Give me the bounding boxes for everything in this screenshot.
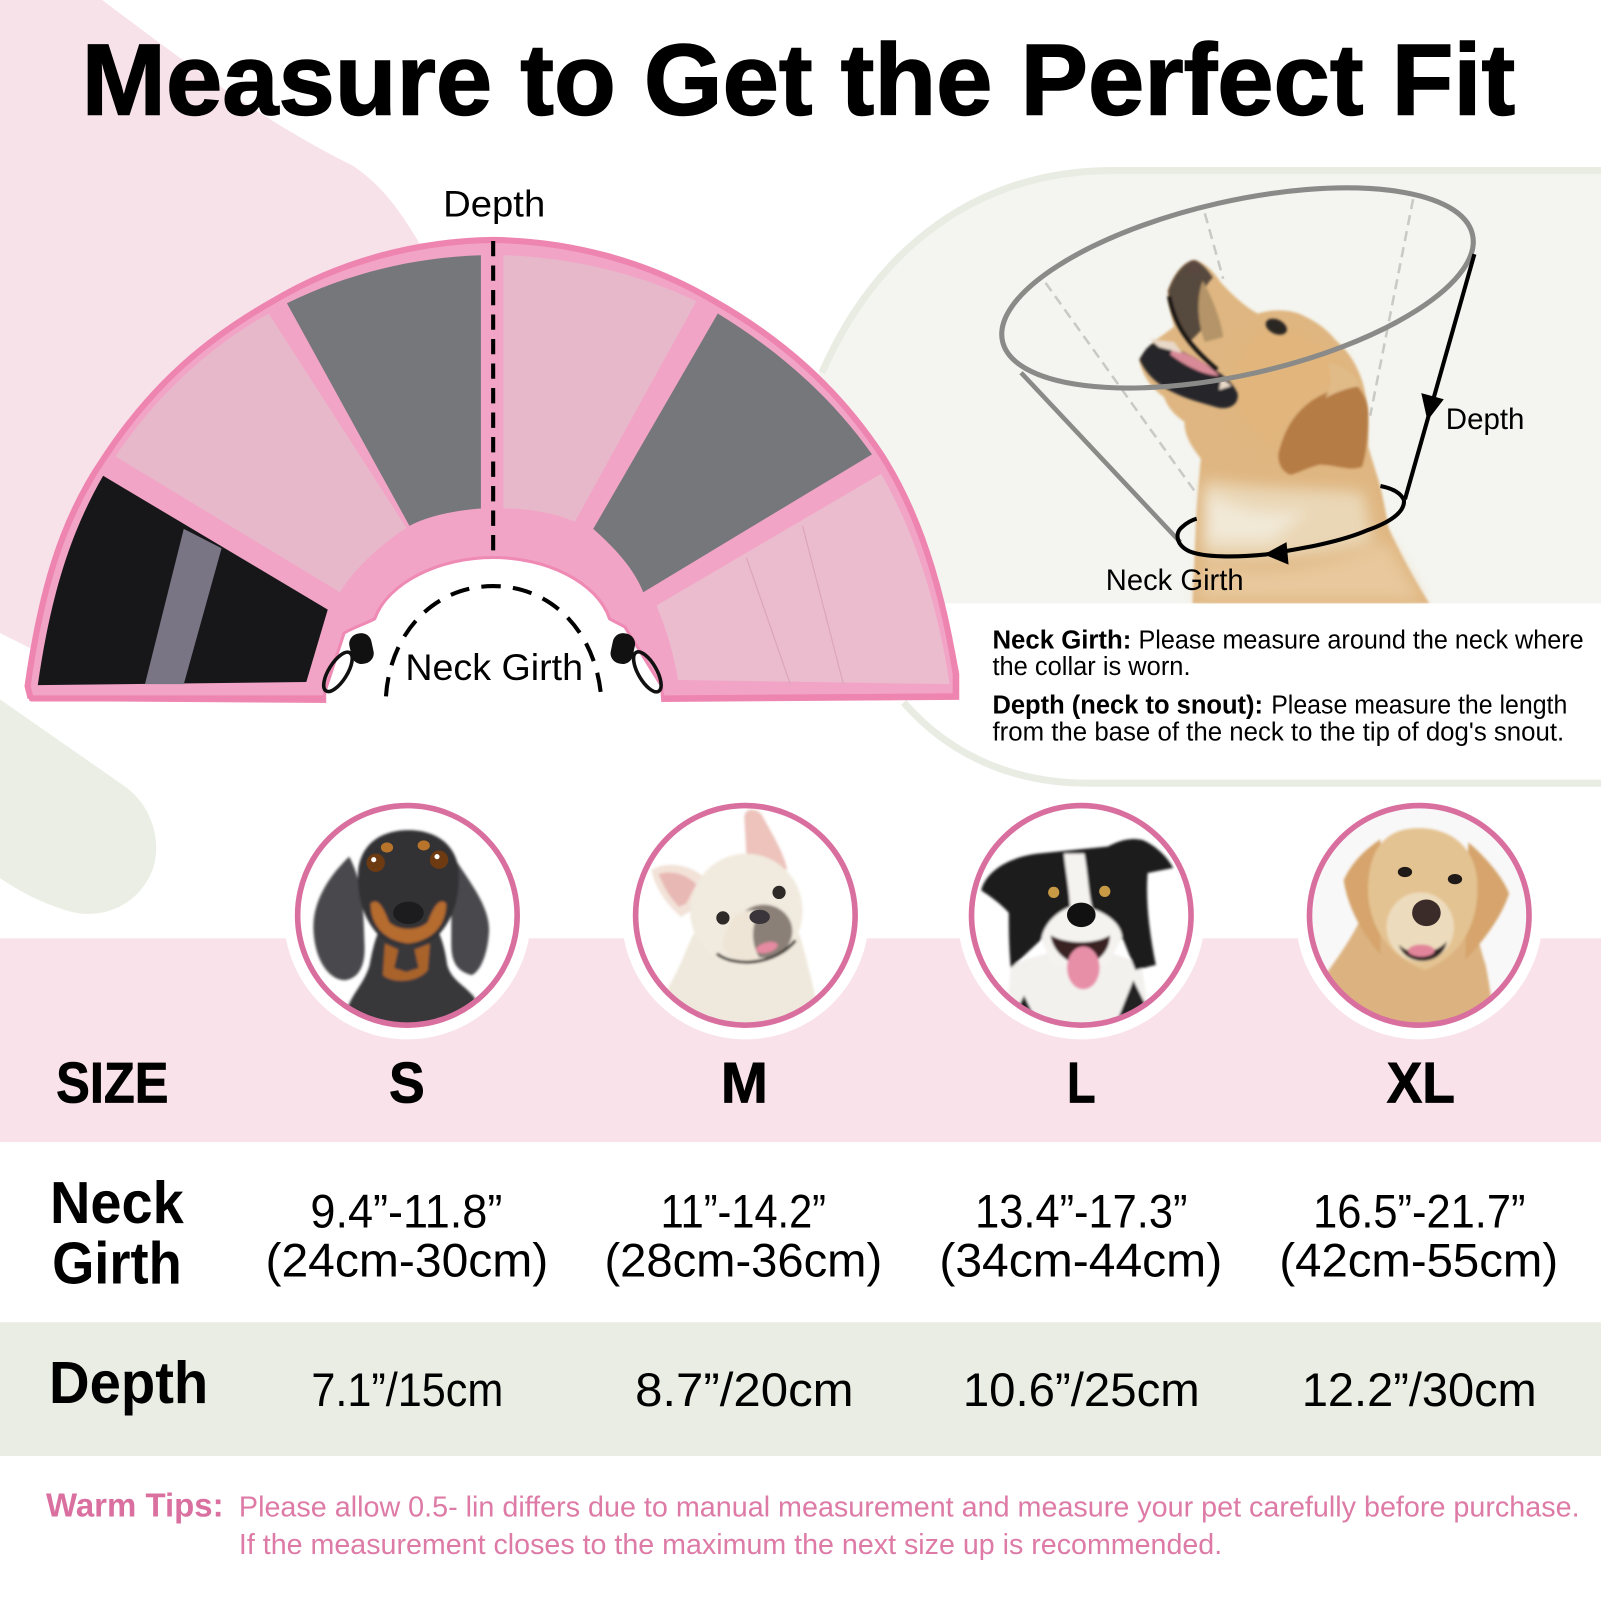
- collar binding and border: [28, 240, 958, 701]
- label: neck girth on dog: Neck Girth: [1106, 564, 1244, 597]
- panel: grey left: [287, 255, 481, 526]
- depth row: 12.2”/30cm: [1302, 1363, 1537, 1416]
- panel: black velcro: [38, 476, 328, 685]
- neck girth row: [50, 1169, 1558, 1296]
- depth row: 8.7”/20cm: [635, 1363, 854, 1416]
- background pink blob: [0, 0, 429, 653]
- panel: pink left: [115, 313, 406, 592]
- ear: [1278, 385, 1368, 475]
- depth row: Depth: [49, 1349, 208, 1416]
- warm tips: Please allow 0.5- lin differs due to manual measurement and measure your pet carefully before purchase.: [239, 1491, 1580, 1523]
- depth row: 7.1”/15cm: [311, 1363, 503, 1416]
- neck girth row: 11”-14.2”: [661, 1184, 826, 1237]
- depth dashed line: [491, 241, 495, 557]
- cone side: [1021, 373, 1180, 542]
- velcro stripe: [145, 529, 222, 684]
- panel: measuring guide background: [807, 171, 1601, 783]
- dog portrait M: [622, 792, 869, 1039]
- size row: M: [721, 1052, 768, 1116]
- measuring instructions: [992, 626, 1584, 746]
- neck girth dashed arc: [386, 586, 601, 700]
- panel: pink centre: [503, 255, 696, 522]
- neck girth row: (34cm-44cm): [939, 1233, 1222, 1286]
- cord lock right: [609, 631, 667, 696]
- warm tips: If the measurement closes to the maximum the next size up is recommended.: [239, 1529, 1222, 1561]
- neck fur shading: [1190, 475, 1425, 602]
- size row: SIZE: [56, 1052, 168, 1116]
- title: Measure to Get the Perfect Fit: [82, 23, 1515, 136]
- label: depth on dog: Depth: [1446, 403, 1524, 436]
- neck girth row: (24cm-30cm): [265, 1233, 548, 1286]
- warm tips: [46, 1487, 1580, 1561]
- size row: [56, 1052, 1455, 1116]
- neck girth row: 9.4”-11.8”: [310, 1184, 502, 1237]
- panel: pink right: [657, 474, 950, 684]
- neck girth row: (42cm-55cm): [1279, 1233, 1558, 1286]
- eye: [1264, 316, 1289, 337]
- measuring instructions: from the base of the neck to the tip of dog's snout.: [992, 718, 1564, 746]
- depth row: [49, 1349, 1537, 1416]
- background green capsule: [0, 699, 156, 914]
- green depth band: [0, 1322, 1601, 1456]
- dog body and head: [1139, 260, 1429, 603]
- label: depth on collar: Depth: [443, 183, 545, 224]
- measuring instructions: Depth (neck to snout):: [992, 692, 1263, 720]
- depth arrow: [1405, 254, 1474, 499]
- dog portrait XL: [1296, 792, 1543, 1039]
- cone rim: [983, 150, 1492, 426]
- dashed cone guides: [1046, 199, 1413, 491]
- mouth: [1139, 341, 1238, 408]
- pink size band: [0, 938, 1601, 1142]
- label: neck girth on collar: Neck Girth: [405, 647, 583, 688]
- measuring instructions: the collar is worn.: [992, 653, 1191, 681]
- measuring instructions: Please measure around the neck where: [1138, 626, 1584, 654]
- dog portrait L: [958, 792, 1205, 1039]
- neck girth arrow: [1178, 486, 1404, 565]
- size row: L: [1067, 1052, 1096, 1116]
- neck girth row: Girth: [52, 1229, 182, 1296]
- neck girth row: (28cm-36cm): [604, 1233, 882, 1286]
- dog profile with cone diagram: [999, 185, 1476, 604]
- panel: grey right: [593, 313, 872, 592]
- warm tips: Warm Tips:: [46, 1487, 224, 1524]
- depth row: 10.6”/25cm: [963, 1363, 1200, 1416]
- muzzle dark: [1168, 260, 1213, 342]
- measuring instructions: Neck Girth:: [992, 626, 1131, 654]
- measuring instructions: Please measure the length: [1271, 692, 1567, 720]
- dog portrait S: [284, 792, 531, 1039]
- size row: S: [389, 1052, 425, 1116]
- neck girth row: 16.5”-21.7”: [1313, 1184, 1525, 1237]
- flat cone collar: [28, 240, 958, 701]
- cord lock left: [318, 631, 376, 696]
- neck girth row: 13.4”-17.3”: [975, 1184, 1187, 1237]
- size row: XL: [1387, 1052, 1455, 1116]
- neck girth row: Neck: [50, 1169, 184, 1236]
